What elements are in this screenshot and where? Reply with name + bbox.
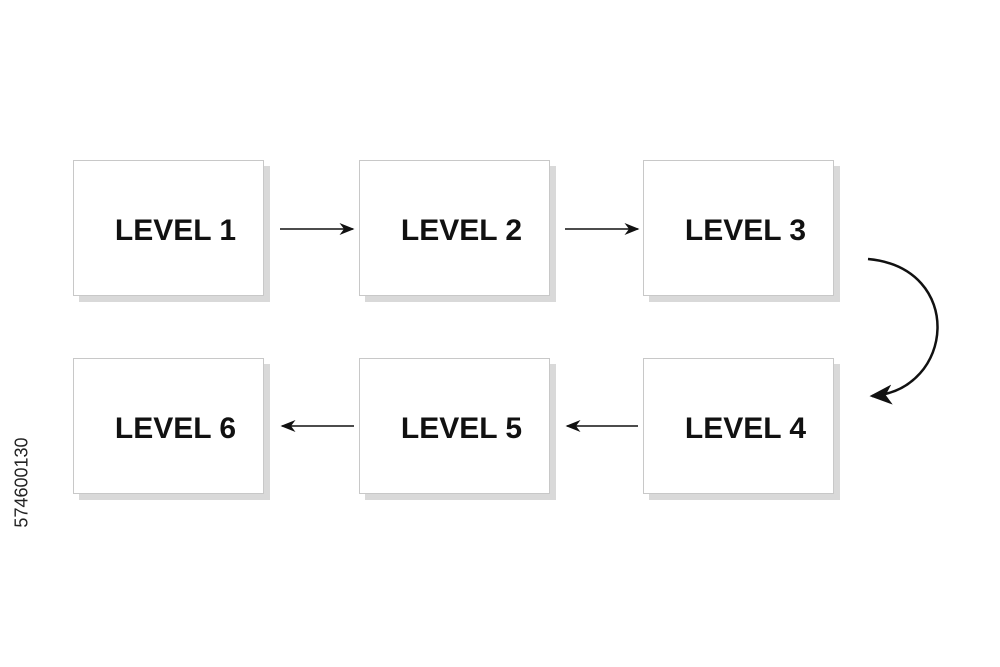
box: level 3 xyxy=(643,160,834,296)
box: level 5 xyxy=(359,358,550,494)
box: level 4 xyxy=(643,358,834,494)
box: level 5: LEVEL 5 xyxy=(401,412,522,444)
box: level 2: LEVEL 2 xyxy=(401,214,522,246)
arrow 1 to 2 xyxy=(280,228,353,230)
box: level 4: LEVEL 4 xyxy=(685,412,806,444)
arrow 4 to 5 xyxy=(567,425,638,427)
box: level 1 xyxy=(73,160,264,296)
box: level 6: LEVEL 6 xyxy=(115,412,236,444)
vertical id text: 574600130 xyxy=(12,437,32,528)
box: level 2 xyxy=(359,160,550,296)
arrow 2 to 3 xyxy=(565,228,638,230)
box: level 3: LEVEL 3 xyxy=(685,214,806,246)
curved arrow 3 to 4 xyxy=(868,259,938,396)
box: level 1: LEVEL 1 xyxy=(115,214,236,246)
box: level 6 xyxy=(73,358,264,494)
arrow 5 to 6 xyxy=(282,425,354,427)
